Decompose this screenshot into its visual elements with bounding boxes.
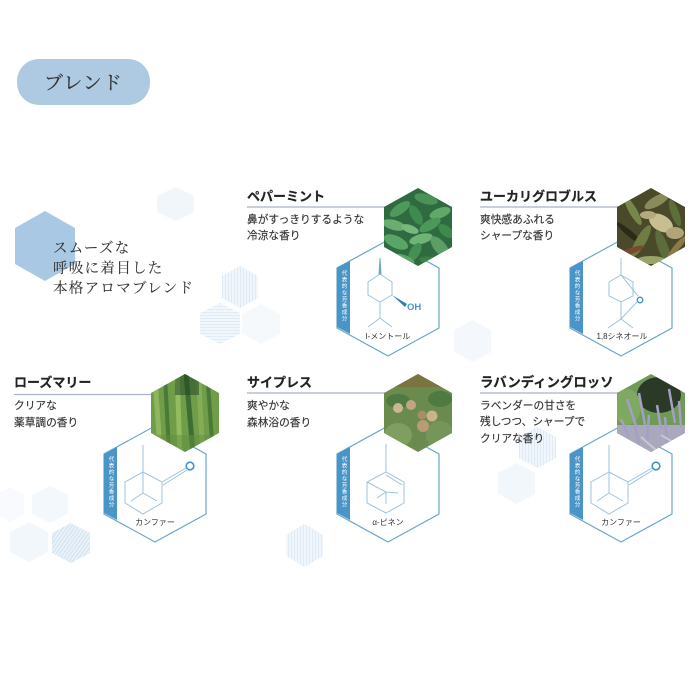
rosemary photo [151,374,219,452]
intro text: 呼吸に着目した [53,260,164,277]
panel: eucalyptus globulus [480,187,691,356]
intro text: スムーズな [53,240,131,257]
decorative background hexagons [0,187,556,567]
cypress description: 森林浴の香り [247,416,311,429]
peppermint molecule: l-menthol: OH [407,302,421,313]
lavandin component band [570,447,583,520]
intro hexagon [15,211,75,281]
cypress component band: 代表的な芳香成分 [340,455,347,508]
lavandin photo [617,374,685,452]
lavandin component band: 代表的な芳香成分 [574,455,580,508]
lavandin molecule label: カンファー [601,518,641,527]
category badge: ブレンド: ブレンド [44,72,123,94]
peppermint component band [337,261,350,334]
lavandin description: クリアな香り [480,433,544,445]
eucalyptus molecule hexagon [570,240,672,356]
eucalyptus photo [617,188,685,266]
eucalyptus description: シャープな香り [480,230,554,242]
peppermint molecule: l-menthol [368,258,421,327]
lavandin description: 残しつつ、シャープで [480,415,585,428]
eucalyptus molecule: 1,8-cineole [608,258,643,328]
cypress component band [337,447,350,520]
peppermint component band: 代表的な芳香成分 [340,269,347,322]
panel: peppermint [247,187,458,356]
rosemary description: 薬草調の香り [14,417,78,429]
peppermint photo [384,188,452,266]
eucalyptus molecule label: 1,8シネオール [596,332,648,341]
rosemary molecule: camphor [125,445,194,514]
eucalyptus description: 爽快感あふれる [480,213,555,226]
cypress molecule label: α-ピネン [372,518,404,527]
rosemary molecule hexagon [104,426,206,542]
eucalyptus title: ユーカリグロブルス [480,189,597,204]
panel: cypress [247,373,458,542]
lavandin description: ラベンダーの甘さを [480,399,576,412]
rosemary molecule label: カンファー [135,518,175,527]
rosemary description: クリアな [14,400,57,412]
panel: lavandin grosso [480,373,691,542]
rosemary component band: 代表的な芳香成分 [108,455,114,508]
cypress photo [384,374,452,452]
peppermint molecule hexagon [337,240,439,356]
cypress title: サイプレス [247,375,312,390]
rosemary title: ローズマリー [14,375,91,390]
peppermint title: ペパーミント [247,189,325,204]
eucalyptus component band [570,261,583,334]
cypress molecule: alpha-pinene [367,444,404,513]
category badge: ブレンド [17,59,150,105]
cypress description: 爽やかな [247,400,290,412]
eucalyptus component band: 代表的な芳香成分 [574,269,580,322]
cypress molecule hexagon [337,426,439,542]
lavandin title: ラバンディングロッソ [480,374,614,390]
lavandin molecule hexagon [570,426,672,542]
rosemary component band [104,447,117,520]
lavandin molecule: camphor [591,445,660,514]
peppermint molecule label: l-メントール [366,332,410,341]
peppermint description: 鼻がすっきりするような [247,213,364,226]
intro text: 本格アロマブレンド [53,279,194,297]
peppermint description: 冷涼な香り [247,230,300,242]
panel: rosemary [14,371,225,542]
